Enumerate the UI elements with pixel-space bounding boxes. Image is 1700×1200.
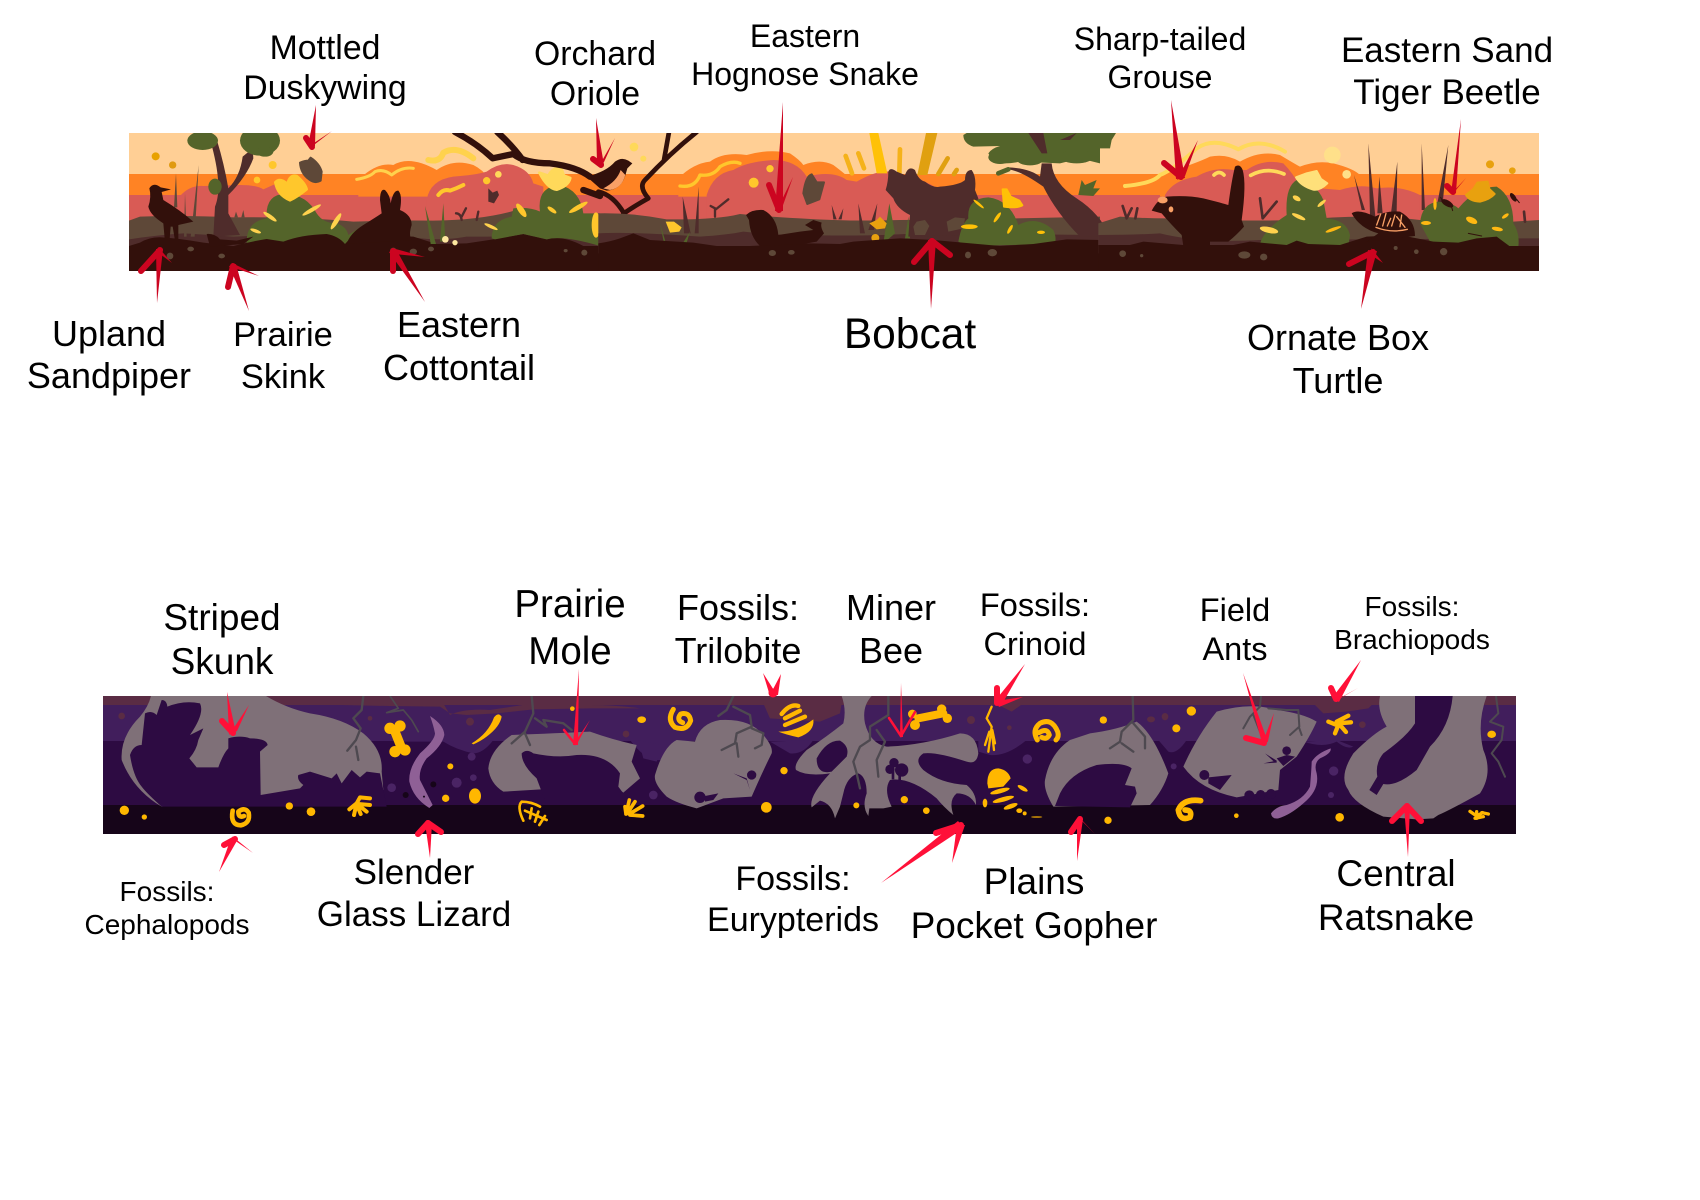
shrub xyxy=(958,197,1056,246)
label: Fossils Brachiopods: Brachiopods xyxy=(1334,624,1490,655)
yellow wind squiggles xyxy=(357,150,473,195)
arrow: Eastern Sand Tiger Beetle xyxy=(1447,119,1466,194)
pale squiggles xyxy=(1125,143,1285,186)
green grass xyxy=(425,203,445,244)
fossil: hand xyxy=(625,800,643,816)
butterfly xyxy=(803,174,824,204)
fossil bone xyxy=(384,720,411,757)
tree canopy xyxy=(187,126,280,195)
Bobcat silhouette xyxy=(886,168,979,237)
label: Eastern Hognose Snake: Hognose Snake xyxy=(691,56,919,92)
label: Mottled Duskywing: Mottled xyxy=(270,29,380,67)
label: Prairie Mole: Mole xyxy=(528,630,612,673)
base soil xyxy=(598,233,1102,273)
flower two xyxy=(539,168,570,190)
fossil: cephalopod spiral xyxy=(232,809,249,825)
label: Orchard Oriole: Oriole xyxy=(550,75,640,113)
pebbles xyxy=(769,249,997,258)
green shrub xyxy=(247,194,358,247)
plant roots xyxy=(347,696,572,760)
Sharp-tailed Grouse silhouette xyxy=(1152,166,1244,246)
brown hills xyxy=(598,213,1100,237)
Striped Skunk silhouette xyxy=(130,700,387,807)
gopher burrow xyxy=(1045,722,1168,807)
shrub three xyxy=(1420,187,1519,247)
labels: above-ground species xyxy=(27,18,1553,401)
fossil: trilobite xyxy=(778,705,813,737)
grass blades xyxy=(174,165,245,237)
label: Bobcat: Bobcat xyxy=(844,311,976,358)
label: Slender Glass Lizard: Glass Lizard xyxy=(317,895,511,934)
tree two trunk xyxy=(1009,163,1102,235)
dots xyxy=(1324,147,1516,179)
label: Fossils Trilobite: Trilobite xyxy=(675,630,801,671)
label: Fossils Brachiopods: Fossils: xyxy=(1365,591,1459,622)
arrow: Sharp-tailed Grouse xyxy=(1164,100,1198,180)
fossil: spiral shell xyxy=(1178,800,1201,819)
Miner Bee silhouette xyxy=(885,758,908,780)
label: Plains Pocket Gopher: Plains xyxy=(984,861,1084,902)
arrow: Fossils Eurypterids xyxy=(881,821,965,883)
pebbles xyxy=(1119,246,1447,260)
roots xyxy=(1243,696,1505,777)
arrow: Fossils Brachiopods xyxy=(1331,660,1361,702)
fossil: bone xyxy=(908,704,952,730)
scene section: centre prairie xyxy=(587,132,1110,273)
shrub leaves xyxy=(961,199,1045,234)
shrub two xyxy=(492,185,600,246)
label: Upland Sandpiper: Upland xyxy=(52,313,166,354)
hills xyxy=(1098,217,1539,253)
scene section: centre burrows xyxy=(623,696,1168,818)
soil specks xyxy=(1147,713,1366,798)
ant burrow two xyxy=(1183,706,1317,797)
arrow: Miner Bee xyxy=(889,683,915,737)
arrow: Orchard Oriole xyxy=(593,118,615,166)
arrows: above-ground pointers xyxy=(141,100,1466,311)
Eastern Hognose Snake silhouette xyxy=(746,210,824,246)
pale flower xyxy=(1296,171,1327,190)
soil specks xyxy=(623,716,1032,799)
fossil: shell fan xyxy=(349,797,370,815)
arrow: Bobcat xyxy=(914,240,950,309)
label: Sharp-tailed Grouse: Grouse xyxy=(1108,59,1212,95)
base soil xyxy=(129,234,600,273)
leaves xyxy=(484,200,600,238)
purple soil drips xyxy=(383,740,687,760)
label: Slender Glass Lizard: Slender xyxy=(354,853,474,892)
grasses xyxy=(683,187,877,233)
sun rays xyxy=(846,133,957,175)
arrow: Fossils Cephalopods xyxy=(219,836,253,872)
label: Fossils Crinoid: Fossils: xyxy=(980,587,1090,623)
canopy tip xyxy=(1098,133,1116,148)
fossil: small trilobite pair xyxy=(520,802,547,825)
label: Plains Pocket Gopher: Pocket Gopher xyxy=(911,905,1157,946)
arrows: underground pointers xyxy=(219,660,1421,883)
Upland Sandpiper silhouette xyxy=(148,185,193,243)
tree branch xyxy=(455,132,600,196)
fossil: eurypterid xyxy=(983,768,1042,818)
fossil worm xyxy=(472,714,502,744)
shrub xyxy=(1260,180,1350,246)
field ants xyxy=(694,770,756,803)
label: Fossils Cephalopods: Fossils: xyxy=(120,876,214,907)
leaves xyxy=(1259,194,1342,235)
scene section: left prairie xyxy=(129,126,600,273)
fossil: brachiopod spiral xyxy=(1035,722,1058,740)
label: Fossils Eurypterids: Fossils: xyxy=(735,860,851,898)
label: Miner Bee: Miner xyxy=(846,587,936,628)
Central Ratsnake silhouette xyxy=(1369,696,1453,795)
amber flower xyxy=(1466,182,1495,202)
oriole tree xyxy=(596,133,699,214)
roots xyxy=(718,696,888,788)
label: Miner Bee: Bee xyxy=(859,630,923,671)
arrow: Prairie Skink xyxy=(228,263,259,311)
small plants xyxy=(456,208,478,220)
fossil dots xyxy=(637,716,930,814)
label: Prairie Skink: Prairie xyxy=(233,316,333,354)
arrow: Eastern Hognose Snake xyxy=(769,102,793,212)
arrow: Prairie Mole xyxy=(564,669,590,745)
label: Upland Sandpiper: Sandpiper xyxy=(27,355,191,396)
shrub leaves xyxy=(250,203,343,235)
label: Fossils Crinoid: Crinoid xyxy=(984,626,1086,662)
tree trunk xyxy=(211,142,253,237)
fossil: small brachiopod xyxy=(1470,811,1488,818)
label: Fossils Trilobite: Fossils: xyxy=(677,587,799,628)
base soil xyxy=(1098,235,1539,273)
fossil: spiral xyxy=(670,709,691,729)
label: Central Ratsnake: Central xyxy=(1336,853,1456,894)
Prairie Mole silhouette xyxy=(522,751,623,805)
Slender lizard xyxy=(1271,748,1331,818)
label: Fossils Eurypterids: Eurypterids xyxy=(707,901,879,939)
squiggle xyxy=(680,162,740,186)
label: Mottled Duskywing: Duskywing xyxy=(243,69,407,107)
scene section: right prairie xyxy=(1098,133,1539,273)
label: Eastern Sand Tiger Beetle: Eastern Sand xyxy=(1341,31,1553,70)
Eastern Sand Tiger Beetle xyxy=(1440,192,1519,236)
pale seeds xyxy=(442,236,458,245)
arrow: Field Ants xyxy=(1243,673,1274,744)
Ornate Box Turtle xyxy=(1352,211,1415,242)
fossil: brachiopod xyxy=(1328,716,1351,733)
label: Field Ants: Field xyxy=(1200,592,1270,628)
burrow cavity xyxy=(817,741,847,772)
label: Fossils Cephalopods: Cephalopods xyxy=(84,909,250,940)
label: Ornate Box Turtle: Turtle xyxy=(1293,360,1383,401)
label: Prairie Mole: Prairie xyxy=(514,583,626,626)
scene section: right burrows xyxy=(1100,696,1505,824)
labels: underground species and fossils xyxy=(84,583,1490,946)
yellow flower xyxy=(1003,189,1022,207)
central bee burrow xyxy=(796,696,978,818)
fossil dots xyxy=(1100,706,1496,824)
arrow: Mottled Duskywing xyxy=(306,105,332,148)
fossil: crinoid xyxy=(985,707,995,752)
Central Ratsnake burrow xyxy=(1344,696,1488,819)
dark soil spots xyxy=(387,753,477,792)
arrow: Fossils Trilobite xyxy=(763,673,781,697)
label: Eastern Sand Tiger Beetle: Tiger Beetle xyxy=(1353,73,1541,112)
label: Prairie Skink: Skink xyxy=(241,358,326,396)
label: Eastern Cottontail: Cottontail xyxy=(383,347,535,388)
arrow: Plains Pocket Gopher xyxy=(1071,816,1095,861)
shrub three leaves xyxy=(1421,198,1510,232)
label: Field Ants: Ants xyxy=(1202,631,1268,667)
maroon drips xyxy=(267,703,640,715)
arrow: Upland Sandpiper xyxy=(141,247,172,303)
Mottled Duskywing butterfly xyxy=(300,158,322,182)
tree two canopy xyxy=(963,133,1100,165)
arrow: Slender Glass Lizard xyxy=(418,823,441,858)
Plains Pocket Gopher silhouette xyxy=(1055,764,1137,807)
Prairie Skink silhouette xyxy=(207,234,253,247)
small butterfly xyxy=(488,188,499,203)
yellow fossil dots xyxy=(120,706,575,820)
pollen dots xyxy=(630,143,774,188)
label: Orchard Oriole: Orchard xyxy=(534,35,656,73)
panel: underground burrows scene xyxy=(103,696,1516,834)
label: Eastern Cottontail: Eastern xyxy=(397,304,521,345)
Orchard Oriole xyxy=(587,159,632,191)
mole burrow xyxy=(488,732,640,793)
arrow: Striped Skunk xyxy=(222,692,249,735)
panel: above-ground prairie scene xyxy=(129,126,1539,273)
pollen dots xyxy=(152,152,502,184)
skunk burrow xyxy=(122,696,383,807)
scene section: left burrows xyxy=(118,696,687,825)
label: Eastern Hognose Snake: Eastern xyxy=(750,18,860,54)
arrow: Fossils Crinoid xyxy=(994,664,1025,707)
label: Ornate Box Turtle: Ornate Box xyxy=(1247,317,1429,358)
label: Central Ratsnake: Ratsnake xyxy=(1318,897,1474,938)
label: Sharp-tailed Grouse: Sharp-tailed xyxy=(1074,21,1246,57)
label: Striped Skunk: Skunk xyxy=(171,641,274,682)
field ants two xyxy=(1199,746,1295,800)
ant burrow xyxy=(655,720,772,808)
Eastern Cottontail silhouette xyxy=(347,190,412,244)
root under gopher burrow xyxy=(1110,696,1145,752)
Slender Glass Lizard xyxy=(409,716,444,808)
label: Striped Skunk: Striped xyxy=(163,597,281,638)
yellow flower xyxy=(275,176,307,200)
arrow: Eastern Cottontail xyxy=(389,248,425,302)
arrow: Central Ratsnake xyxy=(1392,806,1421,857)
arrow: Ornate Box Turtle xyxy=(1349,248,1383,309)
grouse markings xyxy=(1158,197,1173,212)
flowers and green sprouts xyxy=(660,204,910,242)
tall grass spikes xyxy=(1354,143,1448,217)
pebbles xyxy=(167,247,587,259)
